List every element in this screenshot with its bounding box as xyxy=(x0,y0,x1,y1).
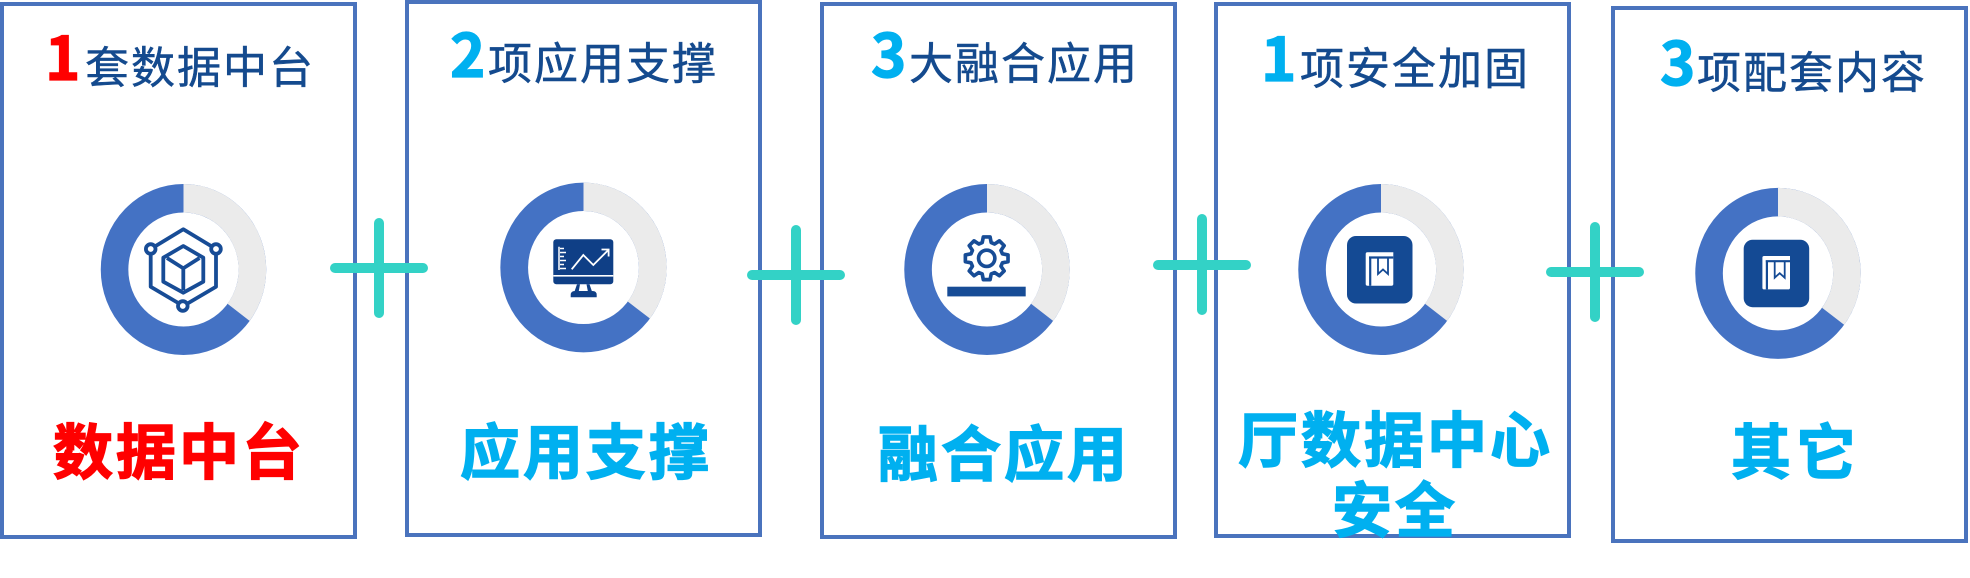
heading: 1 项安全加固 xyxy=(1261,12,1530,99)
heading: 3 大融合应用 xyxy=(871,8,1139,95)
plus sign 1 xyxy=(330,218,428,318)
label: 应用支撑: 应用支撑 xyxy=(460,420,712,487)
icon: book tile xyxy=(1744,240,1809,307)
plus sign 4 xyxy=(1546,222,1644,322)
heading: 2 项应用支撑: 项应用支撑 xyxy=(488,40,718,89)
heading: 1 套数据中台: 套数据中台 xyxy=(85,44,315,93)
donut chart xyxy=(115,184,266,341)
heading: 3 项配套内容: 项配套内容 xyxy=(1697,49,1927,98)
heading: 2 项应用支撑: 2 xyxy=(450,8,485,95)
heading: 1 套数据中台: 1 xyxy=(45,11,80,98)
heading: 3 大融合应用: 3 xyxy=(871,8,906,95)
donut chart xyxy=(514,183,667,338)
label: 其它: 其它 xyxy=(1731,420,1861,487)
heading: 1 套数据中台 xyxy=(45,11,315,98)
heading: 3 大融合应用: 大融合应用 xyxy=(909,40,1139,89)
label: 厅数据中心安全: 安全 xyxy=(1332,478,1458,545)
label: 融合应用: 融合应用 xyxy=(878,422,1130,489)
label: 厅数据中心安全: 厅数据中心 xyxy=(1238,408,1553,475)
heading: 3 项配套内容: 3 xyxy=(1660,16,1695,103)
panel border xyxy=(2,4,355,537)
heading: 2 项应用支撑 xyxy=(450,8,718,95)
icon: gear on a bar xyxy=(947,237,1026,296)
panel: 其它 xyxy=(1613,8,1966,541)
panel border xyxy=(407,2,760,535)
icon: book tile xyxy=(1347,236,1412,304)
panel: 数据中台 xyxy=(2,4,355,537)
plus sign 2 xyxy=(747,225,845,325)
panel border xyxy=(1613,8,1966,541)
label: 厅数据中心安全 xyxy=(1238,408,1553,545)
donut chart xyxy=(1709,188,1861,345)
icon: network cube xyxy=(146,229,221,311)
panel: 应用支撑 xyxy=(407,2,760,535)
panel: 融合应用 xyxy=(822,4,1175,537)
panel: 厅数据中心安全 xyxy=(1216,4,1569,545)
heading: 1 项安全加固: 项安全加固 xyxy=(1300,45,1530,94)
donut chart xyxy=(918,184,1070,341)
heading: 1 项安全加固: 1 xyxy=(1261,12,1296,99)
plus sign 3 xyxy=(1153,214,1251,315)
icon: monitor with trend chart xyxy=(553,239,613,297)
label: 数据中台: 数据中台 xyxy=(53,420,305,487)
heading: 3 项配套内容 xyxy=(1660,16,1927,103)
donut chart xyxy=(1312,184,1464,341)
panel border xyxy=(1216,4,1569,536)
panel border xyxy=(822,4,1175,537)
